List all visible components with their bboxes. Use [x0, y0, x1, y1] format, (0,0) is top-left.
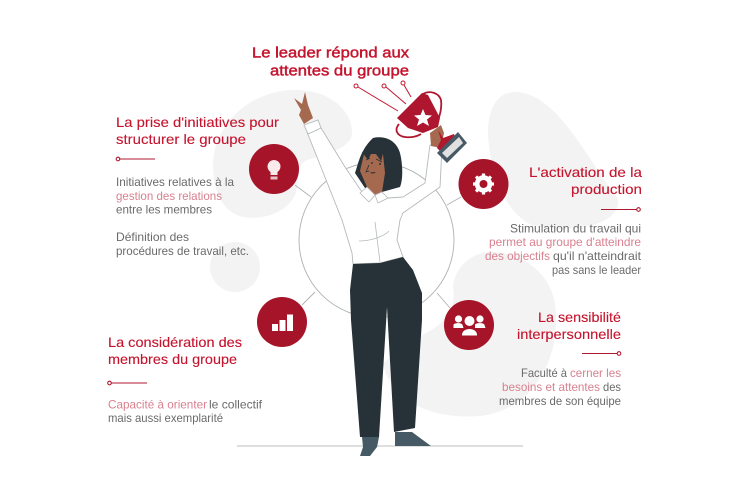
- shoes: [360, 432, 431, 456]
- divider: [582, 352, 621, 355]
- heading: membres du groupe: [108, 351, 237, 367]
- icon: people: [444, 300, 494, 350]
- hand on trophy: [430, 125, 444, 148]
- body text: permet au groupe d'atteindre: [489, 235, 641, 249]
- body text: le collectif: [209, 398, 263, 412]
- central circle with connectors: [295, 162, 461, 318]
- trophy: [354, 81, 467, 163]
- panel: sensibilité: [499, 309, 621, 408]
- body text: [108, 398, 263, 425]
- heading: [116, 114, 279, 147]
- body text: Stimulation du travail qui: [510, 222, 641, 236]
- body text: [499, 366, 621, 408]
- heading: interpersonnelle: [517, 326, 621, 342]
- heading: La sensibilité: [538, 309, 621, 325]
- body text: Initiatives relatives à la: [116, 175, 234, 189]
- stem: [437, 130, 456, 152]
- title: attentes du groupe: [270, 62, 409, 80]
- base plate: [437, 132, 467, 163]
- body text: membres de son équipe: [499, 394, 621, 408]
- raised hand: [294, 92, 313, 124]
- heading: L'activation de la: [529, 164, 642, 180]
- body text: mais aussi exemplarité: [108, 411, 223, 425]
- cup: [397, 93, 440, 133]
- panel: considération: [108, 334, 263, 425]
- panel: activation: [485, 164, 642, 277]
- shirt: [307, 123, 442, 264]
- body text: besoins et attentes: [502, 380, 600, 394]
- star: [414, 109, 432, 126]
- heading: La considération des: [108, 334, 242, 350]
- divider: [108, 381, 147, 385]
- rays: [354, 81, 411, 111]
- body text: [485, 222, 642, 277]
- icon: gear: [458, 159, 508, 209]
- body text: cerner les: [570, 366, 621, 380]
- body text: procédures de travail, etc.: [116, 244, 249, 258]
- body text: gestion des relations: [116, 189, 222, 203]
- cuff: [304, 120, 321, 134]
- body text: qu'il n'atteindrait: [553, 249, 642, 263]
- icon: lightbulb: [249, 144, 299, 194]
- background blobs: [210, 90, 618, 417]
- collar: [360, 187, 388, 203]
- body text: Faculté à: [521, 366, 567, 380]
- pants: [350, 257, 422, 437]
- title: [252, 44, 410, 80]
- handles: [397, 92, 441, 137]
- body text: des: [603, 380, 621, 394]
- icon: bar chart: [257, 297, 307, 347]
- hair: [355, 137, 402, 192]
- divider: [116, 157, 155, 161]
- panel: initiatives: [116, 114, 279, 258]
- heading: production: [571, 181, 642, 197]
- title: Le leader répond aux: [252, 44, 410, 62]
- body text: entre les membres: [116, 202, 212, 216]
- body text: des objectifs: [485, 249, 550, 263]
- divider: [601, 208, 640, 211]
- face: [360, 154, 385, 195]
- heading: [517, 309, 621, 342]
- heading: [108, 334, 242, 367]
- ground line: [237, 445, 523, 447]
- heading: [529, 164, 642, 197]
- heading: La prise d'initiatives pour: [116, 114, 279, 130]
- body text: Définition des: [116, 230, 189, 244]
- character: leader holding trophy: [294, 92, 442, 456]
- body text: [116, 175, 249, 258]
- fringe and facial features: [362, 150, 384, 174]
- body text: pas sans le leader: [552, 263, 641, 277]
- heading: structurer le groupe: [116, 131, 246, 147]
- body text: Capacité à orienter: [108, 398, 207, 412]
